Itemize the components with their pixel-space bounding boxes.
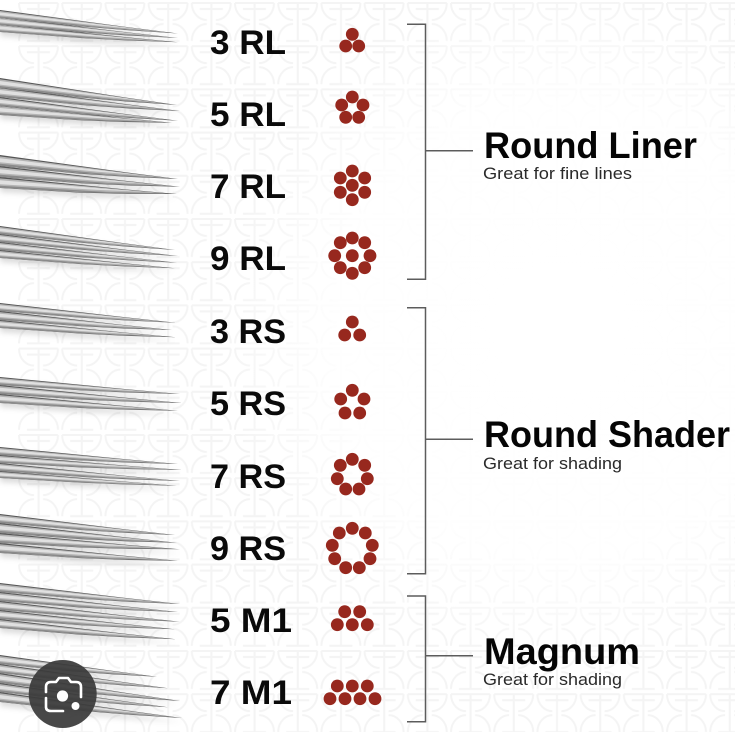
bracket: magnum: [407, 596, 473, 722]
dots: 5 M1: [331, 605, 374, 631]
icon: camera lens badge: [29, 660, 97, 728]
subtext: Round Shader: Great for shading: [483, 455, 622, 473]
needles: 7 RS: [0, 447, 182, 493]
dots: 7 RS: [331, 453, 374, 495]
heading: Round Liner: Round Liner: [484, 125, 697, 166]
heading: Round Shader: Round Shader: [484, 414, 730, 455]
needles: 3 RS: [0, 303, 176, 345]
label: 3 RL: 3 RL: [210, 24, 286, 62]
needles: 5 RL: [0, 78, 180, 133]
heading: Magnum: Magnum: [484, 631, 640, 672]
subtext: Magnum: Great for shading: [483, 671, 622, 689]
needles: 5 M1: [0, 583, 180, 648]
label: 9 RS: 9 RS: [210, 530, 286, 568]
dots: 9 RL: [328, 232, 376, 280]
needles: 3 RL: [0, 10, 178, 50]
bracket: round liner: [407, 24, 473, 279]
subtext: Round Liner: Great for fine lines: [483, 165, 632, 183]
label: 7 M1: 7 M1: [210, 674, 292, 712]
dots: 3 RS: [338, 316, 366, 341]
needles: 9 RS: [0, 514, 180, 571]
dots: 9 RS: [326, 522, 379, 574]
label: 9 RL: 9 RL: [210, 240, 286, 278]
needles: 9 RL: [0, 226, 178, 276]
dots: 3 RL: [339, 28, 365, 52]
label: 5 M1: 5 M1: [210, 602, 292, 640]
label: 5 RL: 5 RL: [210, 96, 286, 134]
dots: 5 RS: [334, 384, 370, 419]
label: 5 RS: 5 RS: [210, 385, 286, 423]
label: 3 RS: 3 RS: [210, 313, 286, 351]
label: 7 RL: 7 RL: [210, 168, 286, 206]
dots: 7 M1: [324, 680, 381, 705]
needles: 7 RL: [0, 155, 180, 205]
label: 7 RS: 7 RS: [210, 458, 286, 496]
dots: 5 RL: [335, 91, 369, 124]
needles: 7 M1: [0, 655, 182, 728]
bracket: round shader: [407, 308, 473, 574]
dots: 7 RL: [334, 165, 371, 206]
needles: 5 RS: [0, 377, 182, 420]
